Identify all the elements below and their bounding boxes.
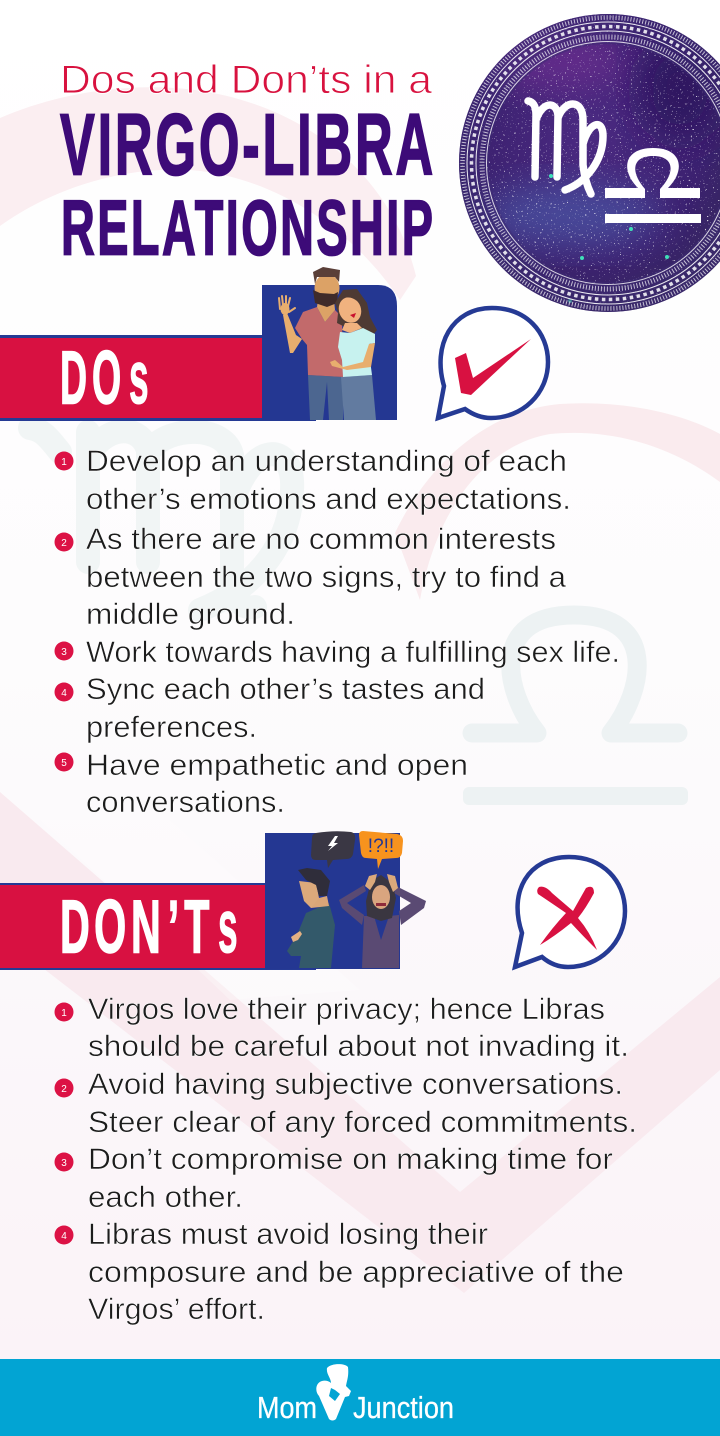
banner: DON'Ts: [0, 883, 316, 970]
item 4: composure and be appreciative of the: [88, 1256, 624, 1289]
illustration: couple: [262, 267, 397, 420]
item 3: 3: [61, 647, 67, 658]
illustration: arguing couple: [265, 831, 426, 969]
item 1: Virgos love their privacy; hence Libras: [88, 993, 605, 1026]
footer logo: Junction: [353, 1390, 454, 1425]
item 5: [54, 749, 468, 819]
item 2: Avoid having subjective conversations.: [88, 1068, 623, 1101]
title: [60, 58, 433, 271]
item 4: Virgos’ effort.: [88, 1293, 265, 1326]
banner: DOs: [0, 335, 316, 421]
item 2: As there are no common interests: [86, 523, 556, 556]
item 3: Work towards having a fulfilling sex life.: [86, 636, 620, 669]
banner: DON'Ts: s: [218, 886, 238, 969]
item 1: should be careful about not invading it.: [88, 1030, 629, 1063]
item 3: Don’t compromise on making time for: [88, 1143, 613, 1176]
item 1: [54, 445, 571, 516]
item 3: [54, 1143, 613, 1214]
list: DOs: [54, 445, 620, 819]
item 2: 2: [61, 1084, 67, 1095]
speech bubble: exclamations: !?!!: [368, 836, 394, 857]
speech bubble: exclamations: [359, 831, 403, 869]
icon: check speech bubble: [438, 308, 548, 418]
item 2: [54, 1068, 637, 1139]
man with crossed arms: [287, 868, 335, 968]
woman: [330, 289, 377, 420]
banner label: DOs: DO: [60, 335, 121, 420]
speech bubble: lightning: [311, 831, 355, 868]
item 4: Libras must avoid losing their: [88, 1218, 488, 1251]
item 1: 1: [61, 1008, 67, 1019]
item 2: [54, 523, 567, 631]
item 5: 5: [61, 758, 67, 769]
item 1: 1: [61, 457, 67, 468]
item 5: conversations.: [86, 786, 285, 819]
item 4: 4: [61, 688, 67, 699]
item 2: between the two signs, try to find a: [86, 561, 567, 594]
item 2: middle ground.: [86, 598, 295, 631]
item 3: 3: [61, 1158, 67, 1169]
title line: Dos and Don'ts in a: Dos and Don’ts in a: [60, 58, 433, 102]
item 1: [54, 993, 629, 1063]
banner: DOs: s: [129, 337, 149, 420]
item 4: 4: [61, 1231, 67, 1242]
list: DON'Ts: [54, 993, 637, 1326]
icon: libra symbol: [605, 148, 701, 223]
item 4: preferences.: [86, 711, 257, 744]
footer logo: Mom: [257, 1390, 317, 1425]
item 2: 2: [61, 538, 67, 549]
icon: virgo symbol: [528, 101, 603, 194]
icon: mother and child silhouette: [316, 1364, 351, 1420]
title line: RELATIONSHIP: RELATIONSHIP: [61, 184, 433, 271]
item 4: [54, 673, 485, 744]
banner label: DON'Ts: DON’T: [60, 884, 210, 969]
woman holding head: [339, 874, 426, 968]
item 4: Sync each other’s tastes and: [86, 673, 485, 706]
item 3: each other.: [88, 1181, 243, 1214]
item 4: [54, 1218, 624, 1326]
item 1: other’s emotions and expectations.: [86, 483, 571, 516]
footer logo: [257, 1364, 454, 1425]
item 1: Develop an understanding of each: [86, 445, 567, 478]
icon: cross speech bubble: [515, 857, 625, 967]
title line: VIRGO-LIBRA: VIRGO-LIBRA: [60, 97, 433, 194]
footer bar: [0, 1359, 720, 1436]
man: [279, 267, 343, 420]
item 2: Steer clear of any forced commitments.: [88, 1106, 637, 1139]
item 5: Have empathetic and open: [86, 749, 468, 782]
zodiac medallion: [459, 14, 720, 312]
